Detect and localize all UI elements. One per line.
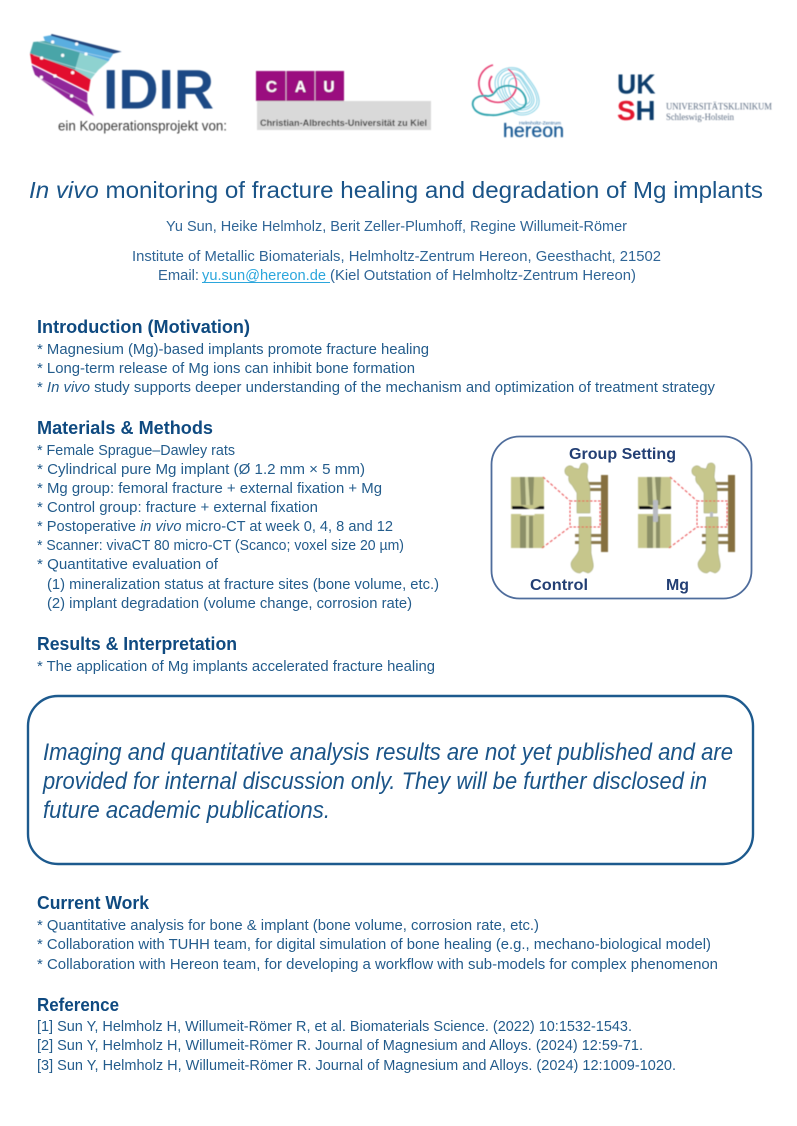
section: materials and methods: Materials & Methods (37, 418, 213, 438)
section: references (37, 995, 676, 1074)
section: materials and methods: * Control group: fracture + external fixation (37, 500, 318, 516)
callout: unpublished results notice: Imaging and quantitative analysis results are not yet published and are (43, 739, 733, 766)
section: materials and methods: * Postoperative in vivo micro-CT at week 0, 4, 8 and 12 (37, 519, 393, 535)
callout: unpublished results notice (28, 696, 753, 864)
affiliation: yu.sun@hereon.de (202, 268, 326, 284)
logo: CAU: U (323, 79, 335, 96)
logo: CAU: C (266, 79, 277, 96)
callout: unpublished results notice: provided for internal discussion only. They will be further disclosed in (42, 768, 707, 795)
icon: teal outline (473, 86, 526, 115)
section: current work (37, 893, 718, 973)
section: current work: * Quantitative analysis for bone & implant (bone volume, corrosion rate, etc.) (37, 918, 539, 934)
section: introduction: Introduction (Motivation) (37, 317, 250, 337)
affiliation: (Kiel Outstation of Helmholtz-Zentrum Hereon) (330, 268, 636, 284)
section: materials and methods: * Female Sprague–Dawley rats (37, 443, 235, 459)
logo: Hereon (473, 65, 564, 142)
icon: red arcs (479, 65, 516, 102)
section: materials and methods: * Quantitative evaluation of (37, 557, 219, 573)
section: current work: * Collaboration with TUHH team, for digital simulation of bone healing (e.g., mechano-biological model) (37, 937, 711, 953)
affiliation: Institute of Metallic Biomaterials, Helmholtz-Zentrum Hereon, Geesthacht, 21502 (132, 249, 661, 265)
section: materials and methods: * Mg group: femoral fracture + external fixation + Mg (37, 481, 382, 497)
section: materials and methods (37, 418, 439, 612)
section: references: Reference (37, 995, 119, 1015)
title: In vivo monitoring of fracture healing and degradation of Mg implants (29, 177, 763, 203)
callout: unpublished results notice: future academic publications. (43, 797, 330, 824)
section: current work: * Collaboration with Hereon team, for developing a workflow with sub-models for complex phenomenon (37, 957, 718, 973)
logo: CAU: A (295, 79, 306, 96)
logo wordmark: IDIR (103, 58, 214, 120)
label: control: Control (530, 577, 588, 594)
group setting heading: Group Setting (569, 446, 676, 463)
section: materials and methods: * Cylindrical pure Mg implant (Ø 1.2 mm × 5 mm) (37, 462, 365, 478)
section: references: [3] Sun Y, Helmholz H, Willumeit-Römer R. Journal of Magnesium and Alloys. (2024) 12:1009-1020. (37, 1058, 676, 1074)
section: results and interpretation (37, 634, 435, 675)
diagram: Mg femur with implant and fixator (638, 463, 735, 573)
diagram: control femur with fixator (511, 463, 608, 573)
section: references: [1] Sun Y, Helmholz H, Willumeit-Römer R, et al. Biomaterials Science. (2022) 10:1532-1543. (37, 1019, 632, 1035)
logo: Hereon: hereon (503, 120, 564, 142)
authors: Yu Sun, Heike Helmholz, Berit Zeller-Plumhoff, Regine Willumeit-Römer (166, 219, 627, 235)
logo: UKSH: UNIVERSITÄTSKLINIKUM (666, 102, 772, 112)
logo: CAU: Christian-Albrechts-Universität zu Kiel (260, 118, 427, 129)
section: introduction: * Magnesium (Mg)-based implants promote fracture healing (37, 342, 429, 358)
section: introduction: * In vivo study supports deeper understanding of the mechanism and optimization of treatment strategy (37, 380, 716, 396)
icon: IDIR curved ribbon (30, 34, 122, 116)
logo: UKSH: SH (617, 95, 656, 126)
section: introduction (37, 317, 716, 396)
section: materials and methods: * Scanner: vivaCT 80 micro-CT (Scanco; voxel size 20 µm) (37, 538, 404, 554)
section: current work: Current Work (37, 893, 150, 913)
section: materials and methods: (1) mineralization status at fracture sites (bone volume, etc.) (47, 577, 439, 593)
logo: UKSH: UK (617, 68, 656, 100)
section: results and interpretation: * The application of Mg implants accelerated fracture healing (37, 659, 435, 675)
icon: concentric blue blob (495, 68, 539, 115)
section: results and interpretation: Results & Interpretation (37, 634, 237, 654)
logo: Hereon: Helmholtz-Zentrum (519, 120, 561, 126)
logo: IDIR (30, 34, 227, 134)
affiliation (132, 249, 661, 284)
logo: CAU (256, 71, 431, 130)
section: references: [2] Sun Y, Helmholz H, Willumeit-Römer R. Journal of Magnesium and Alloys. (2024) 12:59-71. (37, 1038, 643, 1054)
logo caption: ein Kooperationsprojekt von: (58, 118, 227, 134)
affiliation: Email: (158, 268, 199, 284)
panel: group setting (492, 436, 752, 598)
logo: UKSH: Schleswig-Holstein (666, 112, 734, 122)
section: materials and methods: (2) implant degradation (volume change, corrosion rate) (47, 596, 412, 612)
section: introduction: * Long-term release of Mg ions can inhibit bone formation (37, 361, 415, 377)
logo: UKSH (617, 68, 772, 126)
label: Mg: Mg (666, 577, 689, 594)
